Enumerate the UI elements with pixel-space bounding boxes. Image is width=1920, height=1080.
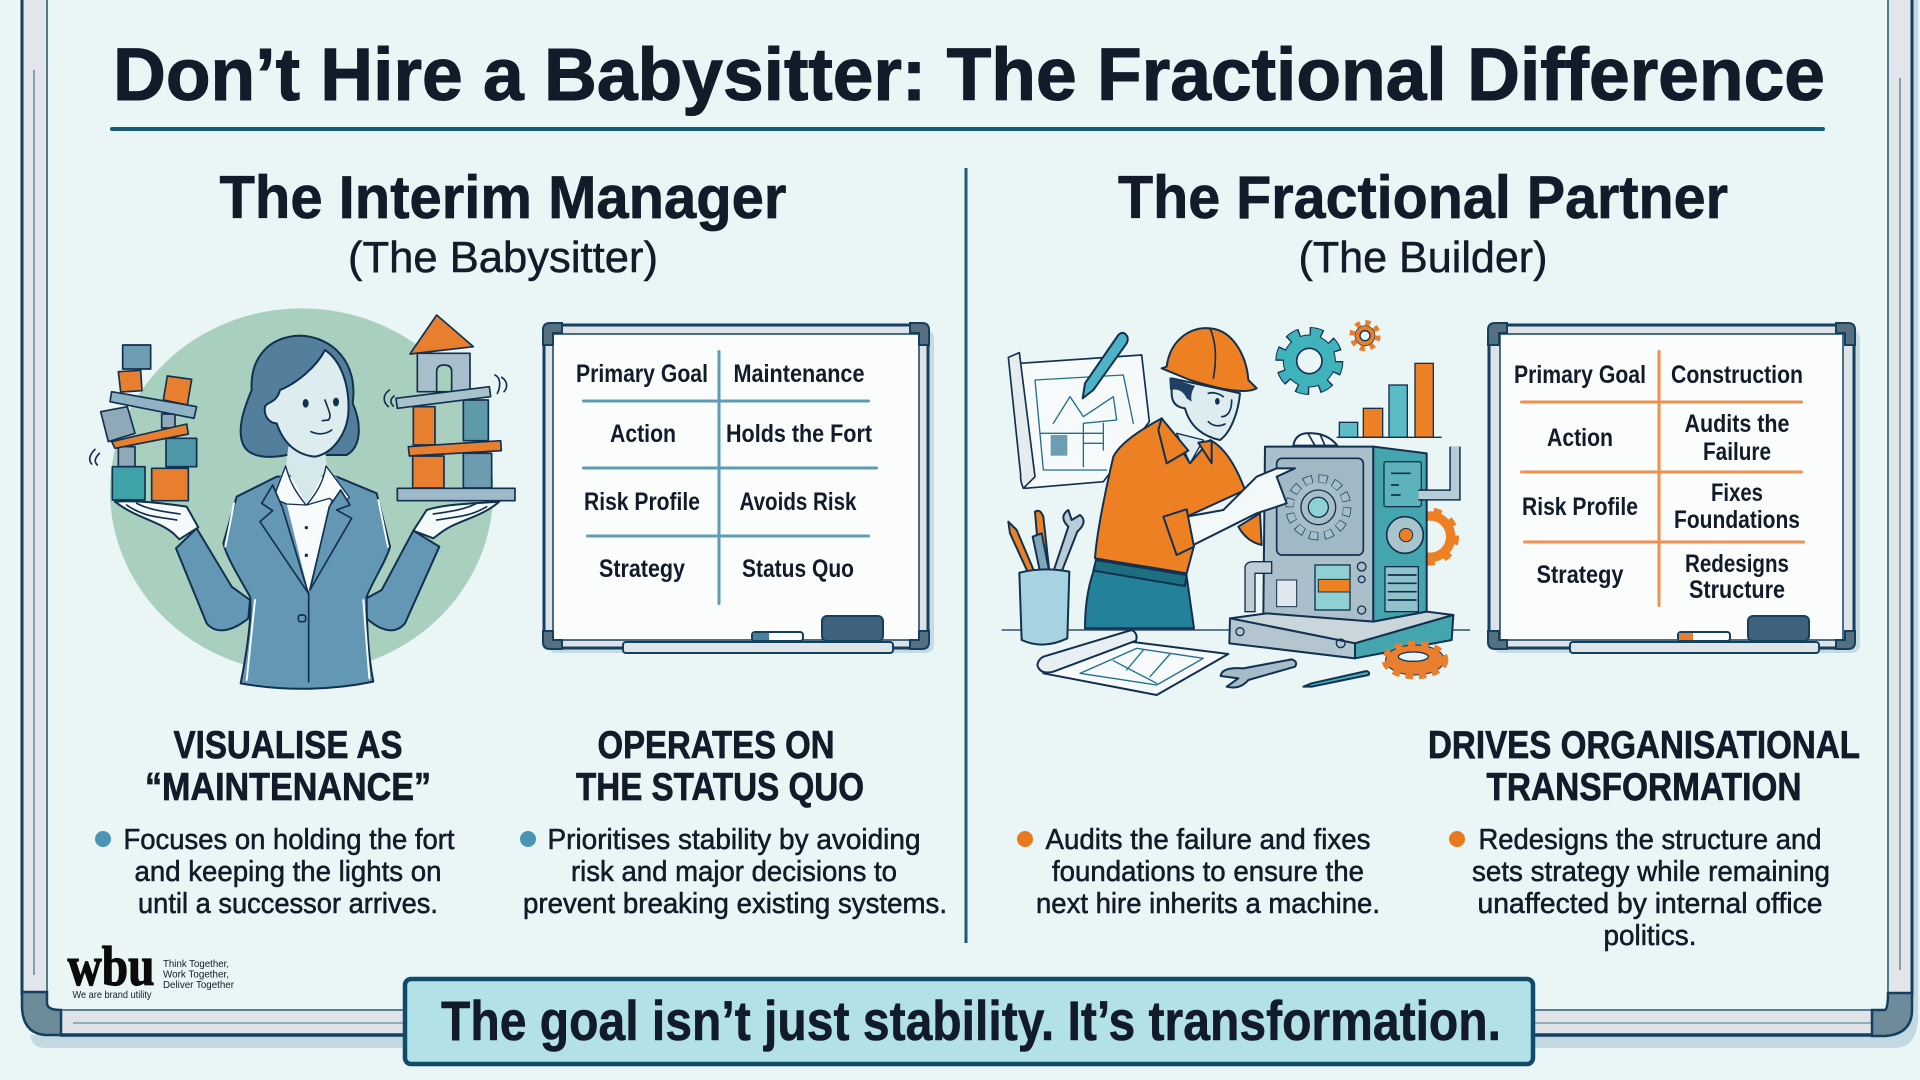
right arm — [363, 531, 439, 630]
board frame — [543, 323, 934, 653]
table text: Risk Profile — [584, 488, 700, 516]
table text: Action — [1547, 424, 1613, 452]
column: visualise as maintenance — [95, 724, 454, 920]
logo: wbu: We are brand utility — [72, 989, 152, 1001]
jacket highlights — [225, 500, 388, 680]
pencil above blueprint — [1083, 333, 1128, 398]
table grid lines — [1520, 350, 1805, 607]
logo: wbu: Deliver Together — [163, 980, 235, 991]
bullet — [95, 831, 111, 847]
jeans — [1085, 563, 1194, 628]
whiteboard: interim comparison — [543, 323, 934, 653]
callout: the goal: The goal isn’t just stability. It’s transformation. — [441, 989, 1501, 1052]
right tower of blocks — [396, 315, 515, 501]
table text: Fixes — [1711, 479, 1763, 507]
bullet — [520, 831, 536, 847]
panel: the fractional partner — [1002, 164, 1860, 952]
title: Don’t Hire a Babysitter: The Fractional Difference — [113, 33, 1825, 116]
body text — [1036, 824, 1380, 920]
rolled plan on desk — [1037, 630, 1228, 695]
logo: wbu: Work Together, — [163, 970, 229, 980]
table text: Holds the Fort — [726, 420, 873, 448]
bullet — [1449, 831, 1465, 847]
machine base — [1229, 612, 1453, 658]
belt — [1093, 560, 1187, 586]
body text: politics. — [1604, 920, 1696, 952]
body text: sets strategy while remaining — [1472, 856, 1830, 888]
pipe — [1418, 447, 1455, 495]
far sleeve — [1238, 513, 1262, 545]
table grid lines — [582, 350, 878, 605]
heading: fractional partner: The Fractional Partner — [1118, 164, 1728, 231]
jacket — [223, 477, 390, 689]
neck — [286, 447, 327, 505]
heading: interim manager — [220, 164, 786, 282]
machine body — [1263, 447, 1427, 622]
pen on desk — [1303, 671, 1369, 687]
heading: interim manager: The Interim Manager — [220, 164, 786, 231]
table text: Risk Profile — [1522, 493, 1638, 521]
body text — [1472, 824, 1830, 952]
pen cup with tools — [1008, 510, 1084, 645]
machine gear panel — [1277, 458, 1363, 555]
body text — [523, 824, 947, 920]
table text: Construction — [1671, 361, 1803, 389]
column: drives organisational transformation — [1428, 724, 1860, 952]
green circle backdrop — [110, 308, 493, 673]
face — [265, 350, 349, 457]
whiteboard: fractional comparison — [1488, 323, 1860, 653]
logo: wbu: Think Together, — [163, 959, 229, 970]
machine side details — [1384, 462, 1423, 612]
heading: fractional partner — [1118, 164, 1728, 282]
left stack of blocks — [101, 345, 197, 501]
table text: Action — [610, 420, 676, 448]
table text — [576, 360, 873, 583]
column: operates on the status quo — [520, 724, 947, 920]
body text: risk and major decisions to — [571, 856, 897, 888]
body text: Redesigns the structure and — [1478, 824, 1822, 856]
neck — [1177, 433, 1203, 463]
heading: fractional partner: (The Builder) — [1298, 233, 1548, 282]
table text: Maintenance — [734, 360, 865, 388]
table text: Foundations — [1674, 506, 1800, 534]
table text: Primary Goal — [1514, 361, 1646, 389]
body text: Focuses on holding the fort — [124, 824, 454, 856]
body text: foundations to ensure the — [1052, 856, 1364, 888]
hair back — [241, 336, 359, 457]
hard hat — [1162, 328, 1257, 391]
orange gear behind machine — [1404, 511, 1456, 563]
worker arm — [1187, 468, 1295, 548]
table text: Audits the — [1684, 410, 1790, 438]
table text: Structure — [1689, 576, 1785, 604]
board frame — [1488, 323, 1860, 653]
subheading: “MAINTENANCE” — [145, 766, 431, 809]
body text: unaffected by internal office — [1478, 888, 1822, 920]
illustration: engineer building machine — [1002, 323, 1470, 695]
subheading — [576, 724, 864, 809]
subheading: OPERATES ON — [598, 724, 834, 767]
head — [1169, 377, 1240, 440]
collar — [1158, 418, 1212, 463]
subheading — [1428, 724, 1860, 809]
body text: until a successor arrives. — [138, 888, 438, 920]
panel: the interim manager — [90, 164, 947, 920]
cuffs and hands — [115, 501, 499, 539]
body text: Audits the failure and fixes — [1046, 824, 1370, 856]
table text: Redesigns — [1685, 550, 1789, 578]
subheading: THE STATUS QUO — [576, 766, 864, 809]
lapels — [260, 485, 352, 593]
table text: Strategy — [599, 555, 685, 583]
subheading: VISUALISE AS — [174, 724, 402, 767]
bar chart — [1337, 363, 1442, 437]
heading: interim manager: (The Babysitter) — [348, 233, 658, 282]
body text — [124, 824, 454, 920]
body text: and keeping the lights on — [134, 856, 442, 888]
callout: the goal — [405, 979, 1533, 1064]
subheading: TRANSFORMATION — [1486, 766, 1802, 809]
facial features — [303, 398, 339, 434]
column: audits and foundations — [1017, 824, 1380, 920]
small orange gear — [1352, 323, 1378, 349]
table text: Avoids Risk — [740, 488, 857, 516]
collar — [273, 466, 349, 507]
jacket button and shirt buttons — [298, 526, 309, 682]
orange gear on desk — [1384, 643, 1446, 677]
centre divider — [964, 168, 968, 943]
teal gear — [1281, 333, 1338, 389]
logo: wbu — [68, 936, 235, 1001]
body text: Prioritises stability by avoiding — [548, 824, 920, 856]
body text: next hire inherits a machine. — [1036, 888, 1380, 920]
table text: Status Quo — [742, 555, 854, 583]
rolled sleeve — [1163, 509, 1194, 555]
machine front details — [1245, 562, 1366, 614]
body text: prevent breaking existing systems. — [523, 888, 947, 920]
wrench on desk — [1221, 659, 1296, 687]
table text: Failure — [1703, 438, 1771, 466]
logo: wbu: wbu — [68, 936, 154, 998]
left arm — [176, 528, 250, 630]
table text: Primary Goal — [576, 360, 708, 388]
title underline — [110, 127, 1825, 131]
table text — [1514, 361, 1803, 604]
bullet — [1017, 831, 1033, 847]
blueprint on wall — [1008, 353, 1149, 488]
wobble marks — [90, 375, 507, 465]
illustration: woman balancing blocks — [90, 308, 515, 689]
hand on top of machine — [1293, 433, 1337, 446]
pipe highlight — [1418, 447, 1455, 495]
subheading — [145, 724, 431, 809]
shirt — [1095, 418, 1245, 573]
floor line — [1002, 628, 1470, 632]
shirt — [280, 477, 337, 592]
table text: Strategy — [1536, 561, 1624, 589]
